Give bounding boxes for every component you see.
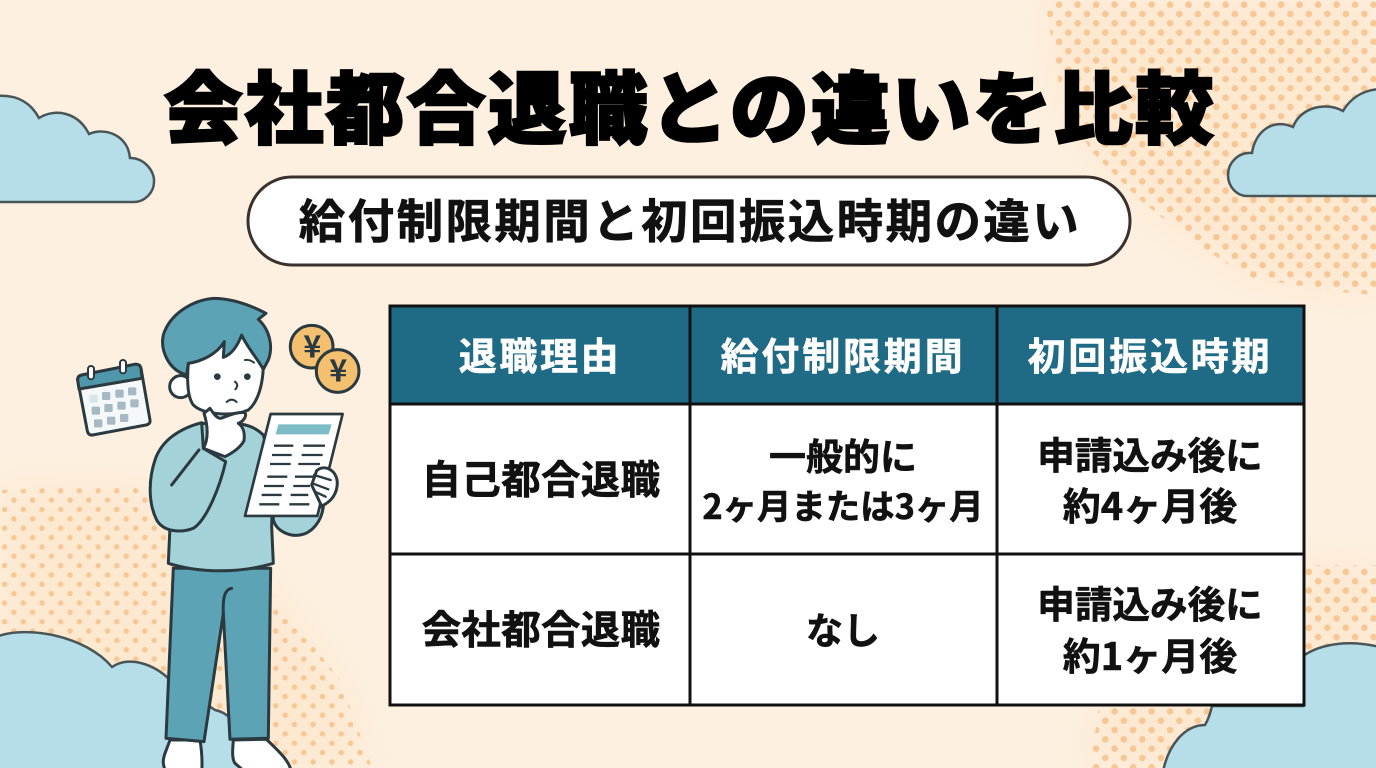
far arm bbox=[273, 507, 323, 535]
row: 自己都合退職: 2ヶ月または3ヶ月 bbox=[702, 479, 984, 529]
subtitle pill: 給付制限期間と初回振込時期の違い bbox=[299, 185, 1081, 252]
table header row bbox=[390, 306, 1304, 404]
row: 自己都合退職 bbox=[422, 425, 1263, 531]
dotted background: top right bbox=[1045, 0, 1376, 295]
trousers bbox=[166, 568, 271, 742]
icon: calendar bbox=[78, 360, 150, 435]
hand on chin bbox=[203, 408, 246, 457]
shoes bbox=[163, 739, 292, 768]
character: person checking a document bbox=[78, 298, 359, 768]
table header row: 初回振込時期 bbox=[1028, 326, 1272, 381]
table grid lines bbox=[390, 306, 1304, 705]
table header row: 給付制限期間 bbox=[721, 326, 965, 381]
head bbox=[163, 298, 271, 414]
hand holding document bbox=[312, 468, 337, 506]
document bbox=[245, 414, 343, 516]
cloud: top right bbox=[1228, 89, 1376, 196]
icon: yen coins: ¥ bbox=[329, 346, 347, 391]
row: 自己都合退職: 自己都合退職 bbox=[422, 449, 660, 506]
row: 自己都合退職: 約4ヶ月後 bbox=[1063, 476, 1237, 531]
row: 会社都合退職 bbox=[422, 574, 1263, 681]
row: 自己都合退職: 申請込み後に bbox=[1037, 425, 1263, 480]
near arm bbox=[150, 423, 226, 531]
row: 会社都合退職: 会社都合退職 bbox=[422, 599, 660, 656]
row: 会社都合退職: 約1ヶ月後 bbox=[1063, 626, 1237, 681]
icon: yen coins bbox=[290, 321, 359, 392]
icon: yen coins: ¥ bbox=[303, 321, 321, 366]
dotted background: bottom left bbox=[0, 485, 372, 768]
comparison table bbox=[390, 306, 1304, 705]
sweater torso bbox=[168, 423, 273, 571]
cloud: bottom right bbox=[1163, 643, 1376, 768]
subtitle pill bbox=[248, 177, 1130, 265]
dotted background: bottom right bbox=[1090, 565, 1376, 768]
table body background bbox=[390, 404, 1304, 705]
row: 会社都合退職: なし bbox=[806, 601, 880, 655]
title: 会社都合退職との違いを比較 bbox=[164, 46, 1216, 160]
row: 自己都合退職: 一般的に bbox=[769, 427, 917, 481]
cloud: top left bbox=[0, 96, 154, 202]
row: 会社都合退職: 申請込み後に bbox=[1037, 574, 1263, 629]
cloud: bottom left bbox=[0, 632, 262, 768]
table header row: 退職理由 bbox=[459, 326, 621, 381]
